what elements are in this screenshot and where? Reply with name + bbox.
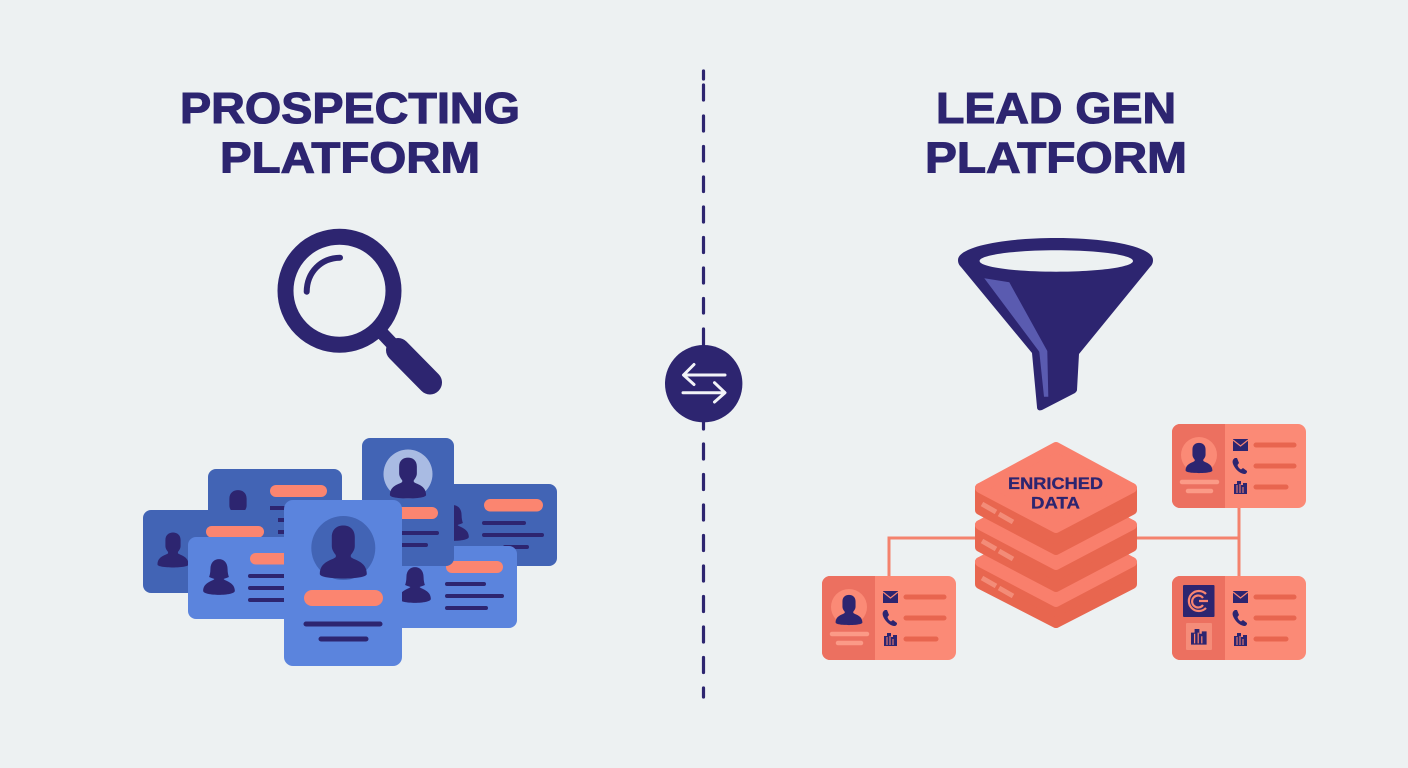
card: back left [143,510,277,593]
data stack [980,447,1132,623]
heading: lead gen platform: PLATFORM [925,134,1187,183]
heading: lead gen platform [925,84,1187,183]
stack layer: bottom [980,521,1132,623]
contact card: top right [1172,424,1306,508]
card: back top left [208,469,342,554]
contact card: bottom right company [1172,576,1306,660]
card: portrait top right [362,438,454,566]
card: back right [423,484,557,566]
stack layer: top [980,447,1132,550]
card: front lower left [188,537,322,619]
label: enriched data: DATA [1031,494,1080,512]
icon: funnel [958,238,1153,410]
icon: magnifying glass [286,237,430,382]
card: center foreground profile [284,500,402,666]
label: enriched data: ENRICHED [1008,474,1103,493]
heading: lead gen platform: LEAD GEN [936,84,1176,133]
icon: swap arrows badge [665,345,742,422]
card: front lower right [384,546,517,628]
heading: prospecting platform: PLATFORM [220,134,480,183]
prospect cards cluster [143,438,557,666]
heading: prospecting platform: PROSPECTING [180,84,520,133]
stack layer: middle [980,484,1132,587]
connector lines [889,508,1239,576]
contact card: bottom left [822,576,956,660]
center dashed divider [702,71,705,697]
label: enriched data [1008,474,1103,512]
heading: prospecting platform [180,84,520,183]
